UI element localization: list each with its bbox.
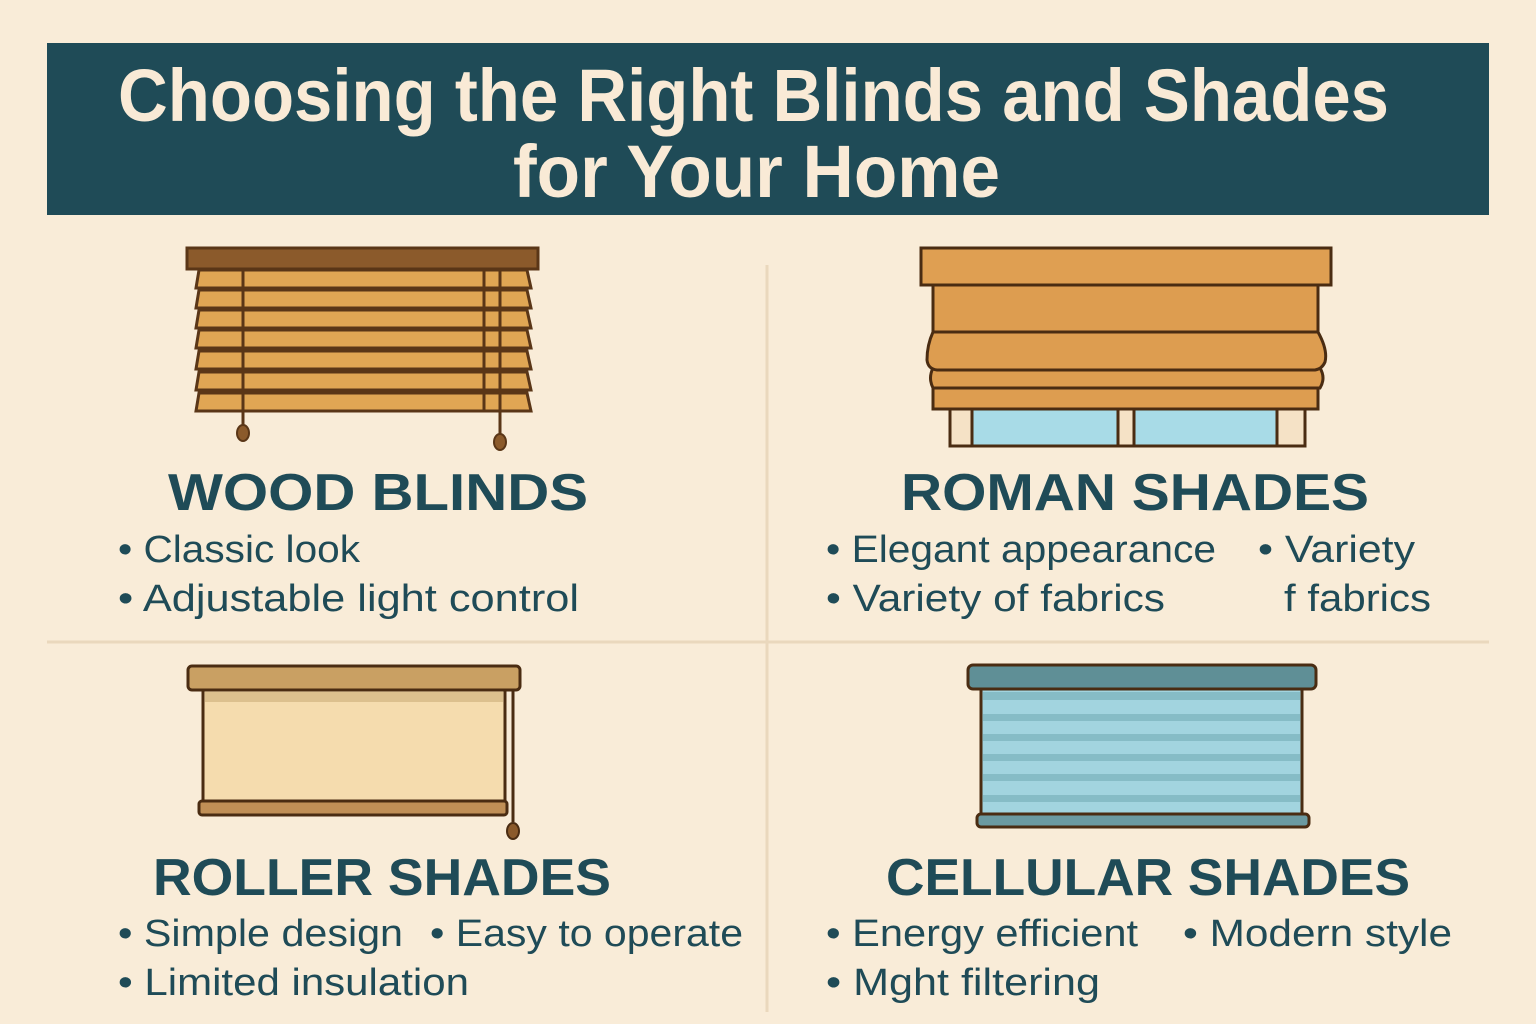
- bullets: roman shades: [826, 529, 1431, 620]
- bullets: cellular shades: [826, 913, 1452, 1004]
- bullets: roller shades: • Simple design: [118, 913, 403, 955]
- icon: cellular shade: [968, 665, 1316, 827]
- heading: roman shades: ROMAN SHADES: [901, 464, 1369, 522]
- title banner: for Your Home: [513, 130, 1000, 213]
- panel: roman shades: [826, 248, 1431, 620]
- icon: roman shades: [921, 248, 1331, 446]
- panel: cellular shades: [826, 665, 1452, 1004]
- bullets: roman shades: • Variety of fabrics: [826, 578, 1165, 620]
- bullets: cellular shades: • Modern style: [1183, 913, 1452, 955]
- panel: roller shades: [118, 666, 743, 1004]
- bullets: cellular shades: • Energy efficient: [826, 913, 1138, 955]
- title banner: Choosing the Right Blinds and Shades: [118, 54, 1389, 137]
- bullets: roller shades: • Limited insulation: [118, 962, 469, 1004]
- bullets: roman shades: • Elegant appearance: [826, 529, 1216, 571]
- bullets: roller shades: [118, 913, 743, 1004]
- bullets: wood blinds: [118, 529, 579, 620]
- bullets: roman shades: f fabrics: [1284, 578, 1431, 620]
- panel: wood blinds: [118, 248, 588, 620]
- bullets: wood blinds: • Adjustable light control: [118, 578, 579, 620]
- heading: roller shades: ROLLER SHADES: [153, 849, 611, 907]
- icon: roller shade: [188, 666, 520, 839]
- bullets: cellular shades: • Mght filtering: [826, 962, 1100, 1004]
- bullets: wood blinds: • Classic look: [118, 529, 361, 571]
- icon: wood blinds: [187, 248, 538, 450]
- bullets: roller shades: • Easy to operate: [430, 913, 743, 955]
- title banner: [47, 43, 1489, 215]
- heading: cellular shades: CELLULAR SHADES: [886, 849, 1410, 907]
- bullets: roman shades: • Variety: [1258, 529, 1415, 571]
- heading: wood blinds: WOOD BLINDS: [168, 464, 588, 522]
